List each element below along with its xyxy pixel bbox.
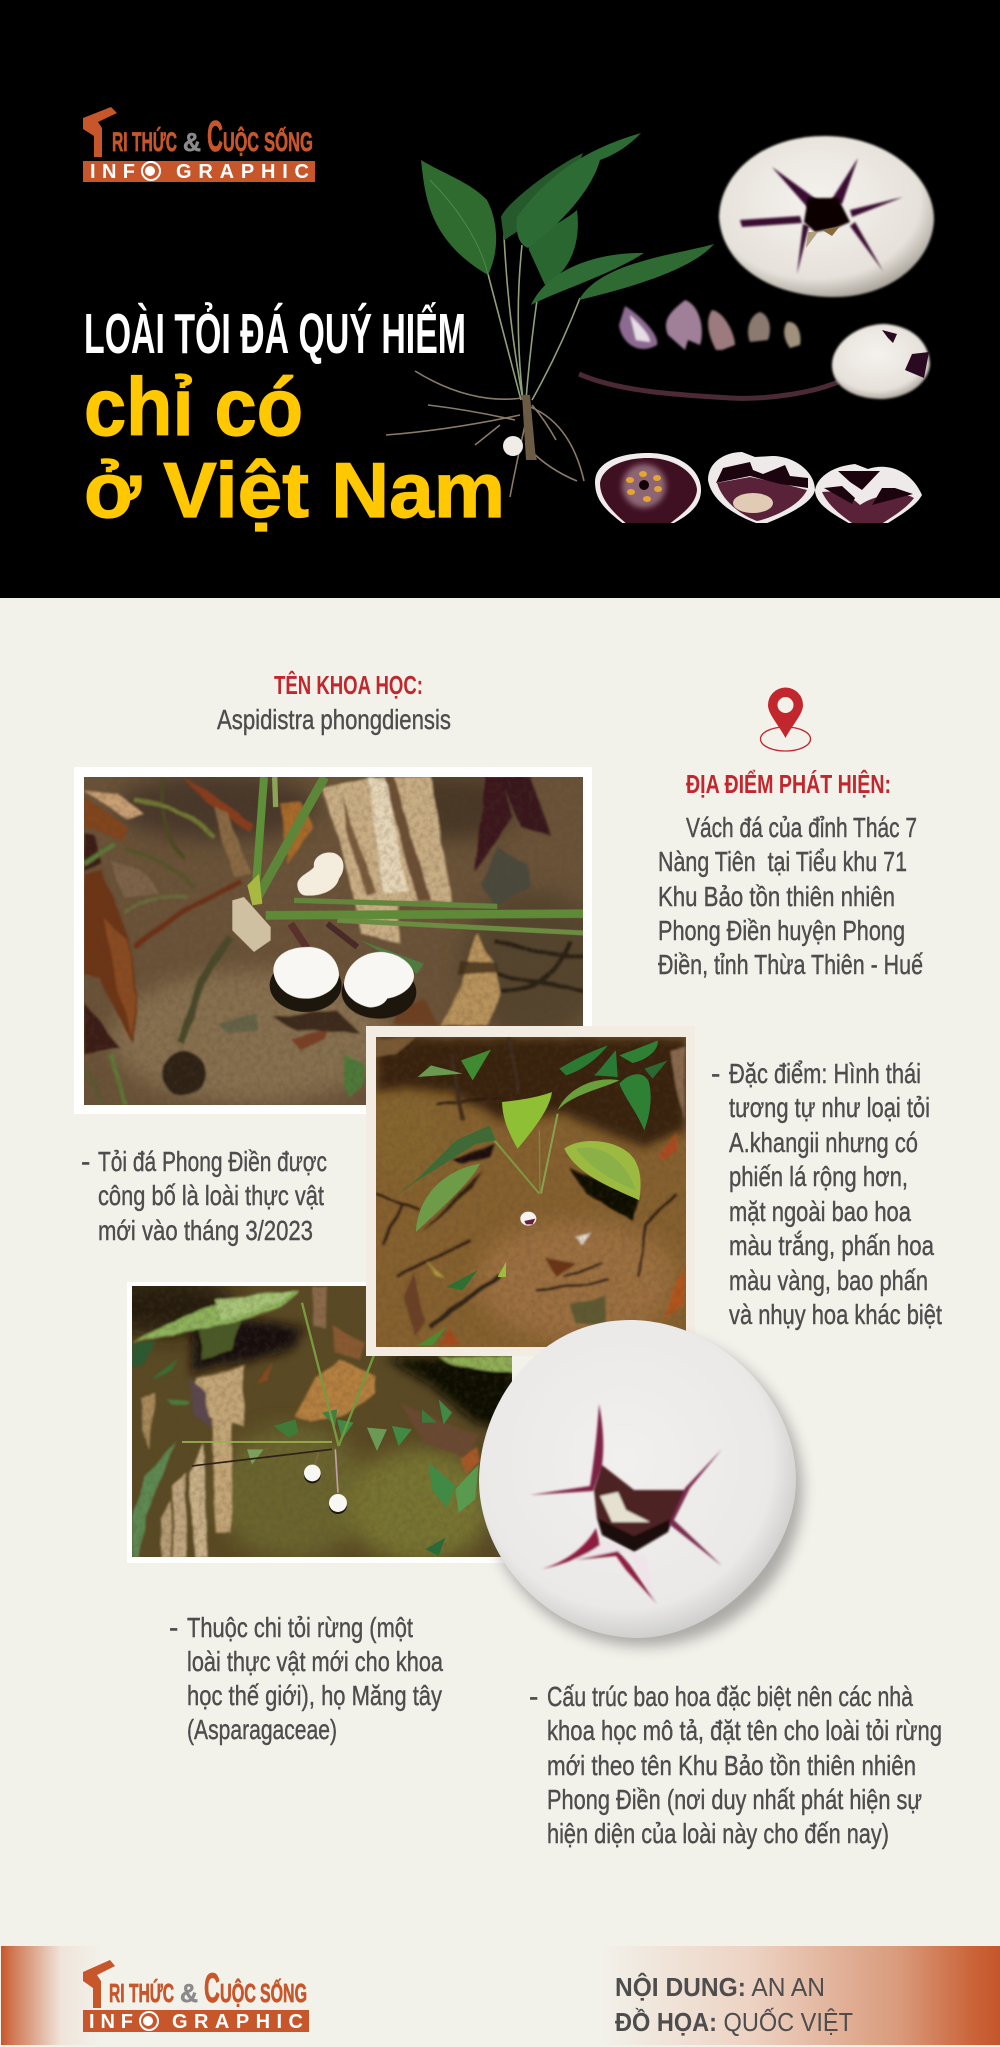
text: characteristics: tương tự như loại tỏi bbox=[729, 1092, 930, 1123]
logo: Tri Thuc & Cuoc Song: C bbox=[207, 112, 223, 161]
text: characteristics bbox=[711, 1058, 942, 1330]
credits: ĐỒ HỌA: QUỐC VIỆT bbox=[615, 2007, 853, 2037]
heading: discovery location: ĐỊA ĐIỂM PHÁT HIỆN: bbox=[686, 769, 891, 799]
logo: Tri Thuc & Cuoc Song: SỐNG bbox=[264, 125, 313, 157]
text: genus and family: học thế giới), họ Măng tây bbox=[187, 1680, 442, 1711]
text: discovery location: Phong Điền huyện Phong bbox=[658, 915, 905, 946]
text: characteristics: A.khangii nhưng có bbox=[729, 1127, 918, 1158]
flower centre: star bbox=[530, 1404, 722, 1604]
heading: scientific name: Aspidistra phongdiensis bbox=[217, 704, 451, 735]
footer logo bbox=[83, 1960, 309, 2033]
footer logo: C bbox=[204, 1964, 220, 2011]
text: published date: mới vào tháng 3/2023 bbox=[98, 1215, 313, 1246]
illustration: flower with stalk bbox=[579, 324, 930, 399]
text: characteristics: và nhụy hoa khác biệt bbox=[729, 1299, 942, 1330]
big flower close-up bbox=[479, 1320, 802, 1646]
illustration: large flower top bbox=[719, 136, 934, 297]
illustration: tepals row bbox=[619, 300, 800, 350]
text: naming explanation bbox=[529, 1681, 942, 1849]
footer logo: & bbox=[180, 1978, 198, 2008]
logo: Tri Thuc & Cuoc Song: & bbox=[183, 127, 201, 157]
footer logo: SỐNG bbox=[260, 1978, 307, 2008]
text: characteristics: mặt ngoài bao hoa bbox=[729, 1196, 911, 1227]
text: discovery location: Điền, tỉnh Thừa Thiên - Huế bbox=[658, 949, 923, 980]
text: naming explanation: mới theo tên Khu Bảo tồn thiên nhiên bbox=[547, 1750, 916, 1781]
text: genus and family: Thuộc chi tỏi rừng (một bbox=[187, 1612, 413, 1643]
credits: NỘI DUNG: AN AN bbox=[615, 1972, 825, 2002]
footer logo: UỘC bbox=[220, 1978, 256, 2008]
footer logo: INF bbox=[89, 2011, 133, 2033]
text: published date: công bố là loài thực vật bbox=[98, 1180, 324, 1211]
icon: location pin bbox=[760, 688, 810, 751]
text: published date: - bbox=[81, 1146, 90, 1177]
text: characteristics: - bbox=[711, 1058, 720, 1089]
text: discovery location: Vách đá của đỉnh Thác 7 bbox=[686, 812, 917, 843]
section 3 bbox=[815, 464, 922, 525]
logo: Tri Thuc & Cuoc Song bbox=[83, 107, 315, 183]
text: genus and family: loài thực vật mới cho khoa bbox=[187, 1646, 443, 1677]
text: discovery location: Khu Bảo tồn thiên nhiên bbox=[658, 881, 895, 912]
text: discovery location bbox=[658, 812, 923, 980]
text: discovery location: Nàng Tiên tại Tiểu khu 71 bbox=[658, 846, 907, 877]
title line 3: ở Việt Nam bbox=[84, 446, 505, 534]
illustration: whole plant bbox=[386, 133, 714, 497]
discovery location block bbox=[658, 769, 923, 980]
header panel bbox=[0, 0, 1000, 598]
section 1: stamens bbox=[595, 453, 701, 525]
footer logo: GRAPHIC bbox=[172, 2011, 303, 2033]
text: characteristics: màu vàng, bao phấn bbox=[729, 1265, 928, 1296]
text: naming explanation: - bbox=[529, 1681, 538, 1712]
illustration: flower cross sections bbox=[595, 452, 922, 525]
logo: Tri Thuc & Cuoc Song: GRAPHIC bbox=[176, 161, 309, 183]
logo: Tri Thuc & Cuoc Song: RI THỨC bbox=[112, 126, 177, 157]
text: characteristics: Đặc điểm: Hình thái bbox=[729, 1058, 921, 1089]
text: genus and family: (Asparagaceae) bbox=[187, 1714, 337, 1745]
photo 2: plant with bright green leaves bbox=[363, 1026, 695, 1356]
photo 1: flowers on forest floor bbox=[74, 767, 607, 1114]
text: genus and family bbox=[169, 1612, 443, 1745]
section 2: pistil bbox=[708, 452, 815, 525]
footer band bbox=[1, 1946, 1000, 2045]
logo: Tri Thuc & Cuoc Song: UỘC bbox=[223, 126, 259, 157]
title line 1: LOÀI TỎI ĐÁ QUÝ HIẾM bbox=[84, 301, 466, 366]
logo: Tri Thuc & Cuoc Song: INF bbox=[90, 161, 135, 183]
text: published date: Tỏi đá Phong Điền được bbox=[98, 1146, 327, 1177]
title line 2: chỉ có bbox=[84, 362, 303, 453]
text: published date bbox=[81, 1146, 327, 1246]
heading: scientific name bbox=[217, 670, 451, 735]
text: characteristics: màu trắng, phấn hoa bbox=[729, 1230, 934, 1261]
text: characteristics: phiến lá rộng hơn, bbox=[729, 1161, 908, 1192]
footer logo: RI THỨC bbox=[109, 1978, 174, 2008]
text: genus and family: - bbox=[169, 1612, 178, 1643]
photo 3: plant with flowers among straw bbox=[127, 1282, 512, 1563]
text: naming explanation: hiện diện của loài này cho đến nay) bbox=[547, 1818, 889, 1849]
credits bbox=[615, 1972, 853, 2037]
heading: scientific name: TÊN KHOA HỌC: bbox=[274, 670, 423, 700]
